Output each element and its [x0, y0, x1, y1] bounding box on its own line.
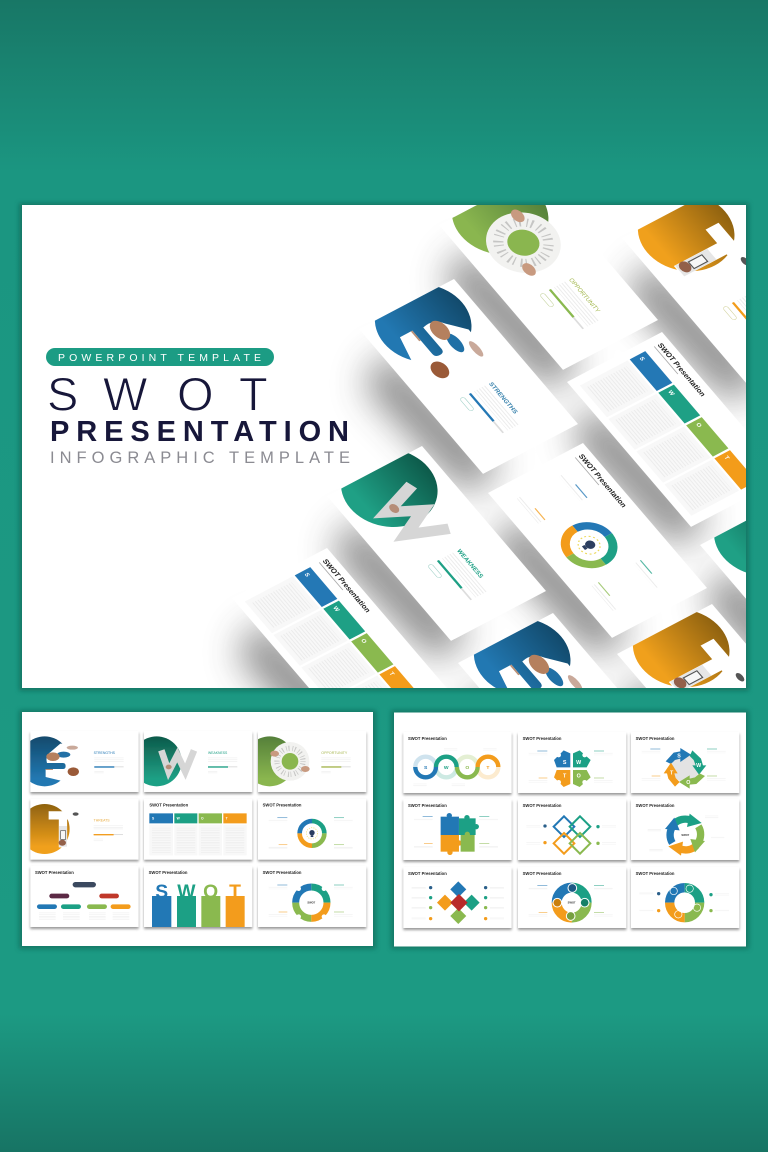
- slide: table right: O: [694, 422, 703, 429]
- thumbnail: opportunity: [245, 731, 366, 792]
- thumbnail: bulb ring: [258, 799, 366, 860]
- thumbnail: threats: [20, 799, 139, 860]
- thumbnail: diamonds solid: SWOT Presentation: [408, 871, 447, 876]
- badge: powerpoint template: [46, 348, 274, 366]
- thumbnail: weakness: WEAKNESS: [208, 751, 228, 755]
- thumbnail: circular arrows: W: [696, 763, 702, 769]
- thumbnail: SWOT wave: S: [424, 765, 428, 771]
- thumbnail: SWOT wave: W: [444, 765, 449, 771]
- thumbnail: puzzle: SWOT Presentation: [408, 803, 447, 808]
- slide: strengths: STRENGTHS: [487, 381, 519, 415]
- thumbnail shadows: [403, 734, 739, 930]
- thumbnail: quadrant ring: [258, 866, 366, 927]
- thumbnail: circular arrows: T: [670, 771, 674, 777]
- thumbnail: circular arrows: S: [677, 753, 681, 759]
- subtitle: infographic template: INFOGRAPHIC TEMPLATE: [50, 449, 350, 467]
- title: PRESENTATION: PRESENTATION: [50, 416, 349, 448]
- badge: powerpoint template: POWERPOINT TEMPLATE: [58, 352, 261, 364]
- thumbnail: SWOT wave: [403, 732, 512, 793]
- thumbnail: table: T: [226, 816, 228, 820]
- thumbnail: threats: THREATS: [94, 819, 110, 823]
- thumbnail grid: [20, 731, 366, 927]
- thumbnail: table: SWOT Presentation: [149, 803, 189, 808]
- thumbnail: SWOT tags: W: [177, 882, 196, 903]
- slide: threats bottom: [617, 604, 746, 688]
- thumbnail: diamonds outline: SWOT Presentation: [523, 803, 562, 808]
- thumbnail: circle four nodes: SWOT: [568, 901, 576, 905]
- thumbnail: SWOT wave: O: [465, 765, 469, 771]
- thumbnail: strengths: [20, 731, 139, 792]
- thumbnail: table: [144, 799, 252, 860]
- panel shadows: [19, 203, 749, 949]
- thumbnail: arrow ring: [631, 799, 739, 860]
- thumbnail: SWOT wave: SWOT Presentation: [408, 736, 447, 741]
- thumbnail: weakness: [132, 731, 252, 792]
- panel: left thumbnails: [20, 712, 373, 946]
- slide: weakness: WEAKNESS: [455, 548, 485, 579]
- thumbnail: circular arrows: O: [686, 780, 690, 786]
- slide: teal partial right edge: [700, 520, 746, 598]
- thumbnail: four petals: W: [576, 760, 582, 766]
- slide: opportunity: OPPORTUNITY: [567, 277, 601, 314]
- slide: circle diagram: SWOT Presentation: [576, 453, 629, 509]
- slide: strengths bottom: [458, 613, 617, 688]
- slide: strengths: [371, 279, 578, 474]
- thumbnail: opportunity: OPPORTUNITY: [321, 751, 348, 755]
- slide drop shadows: [220, 238, 746, 688]
- slide: table bottom left: S: [302, 572, 310, 578]
- slide: table bottom left: T: [387, 671, 395, 677]
- thumbnail: table: W: [177, 816, 181, 820]
- thumbnail shadows: [30, 733, 366, 929]
- thumbnail: SWOT tags: S: [155, 882, 168, 903]
- thumbnail: four petals: T: [563, 773, 567, 779]
- slide: threats top right: [634, 205, 746, 383]
- slide: opportunity: [451, 205, 658, 370]
- thumbnail: four petals: S: [563, 760, 567, 766]
- panel: hero white slide: [22, 205, 746, 688]
- thumbnail: SWOT tags: SWOT Presentation: [149, 870, 188, 875]
- slide: table right: S: [637, 356, 645, 362]
- slide: circle diagram: [488, 443, 707, 638]
- thumbnail: diamonds outline: [518, 799, 626, 860]
- thumbnail: blob ring: [631, 867, 739, 928]
- thumbnail: circle four nodes: [518, 867, 626, 928]
- slide: table bottom left: SWOT Presentation: [320, 558, 373, 614]
- slide: table right: [567, 332, 746, 527]
- thumbnail: SWOT tags: O: [203, 882, 218, 903]
- thumbnail: circular arrows: SWOT Presentation: [636, 736, 675, 741]
- thumbnail: quadrant ring: SWOT: [307, 901, 316, 905]
- panel: right thumbnails: [394, 712, 746, 946]
- thumbnail: diamonds solid: [403, 867, 512, 928]
- thumbnail: org chart: [30, 866, 139, 927]
- thumbnail: SWOT tags: T: [229, 882, 241, 903]
- slide: table bottom left: O: [359, 638, 368, 645]
- slide: table bottom left: W: [331, 606, 340, 613]
- thumbnail: strengths: STRENGTHS: [94, 751, 116, 755]
- thumbnail: SWOT wave: T: [486, 765, 489, 771]
- slide: table bottom left: [244, 548, 438, 688]
- thumbnail grid: [403, 732, 739, 928]
- slide: table right: SWOT Presentation: [655, 342, 708, 398]
- thumbnail: bulb ring: SWOT Presentation: [263, 803, 302, 808]
- thumbnail: circle four nodes: SWOT Presentation: [523, 871, 562, 876]
- thumbnail: SWOT tags: [144, 866, 252, 927]
- thumbnail: four petals: [518, 732, 626, 793]
- thumbnail: quadrant ring: SWOT Presentation: [263, 870, 302, 875]
- thumbnail: puzzle: [403, 799, 512, 860]
- thumbnail: arrow ring: SWOT: [681, 833, 690, 837]
- slide: table right: T: [722, 455, 730, 461]
- title: SWOT: SWOT: [47, 368, 268, 420]
- thumbnail: four petals: O: [577, 773, 581, 779]
- thumbnail: table: O: [201, 816, 204, 820]
- thumbnail: circular arrows: [631, 732, 739, 793]
- thumbnail: arrow ring: SWOT Presentation: [636, 803, 675, 808]
- thumbnail: org chart: SWOT Presentation: [35, 870, 74, 875]
- thumbnail: blob ring: SWOT Presentation: [636, 871, 675, 876]
- slide: weakness: [339, 446, 546, 641]
- thumbnail: table: S: [152, 816, 155, 820]
- thumbnail: four petals: SWOT Presentation: [523, 736, 562, 741]
- slide: table right: W: [666, 390, 675, 397]
